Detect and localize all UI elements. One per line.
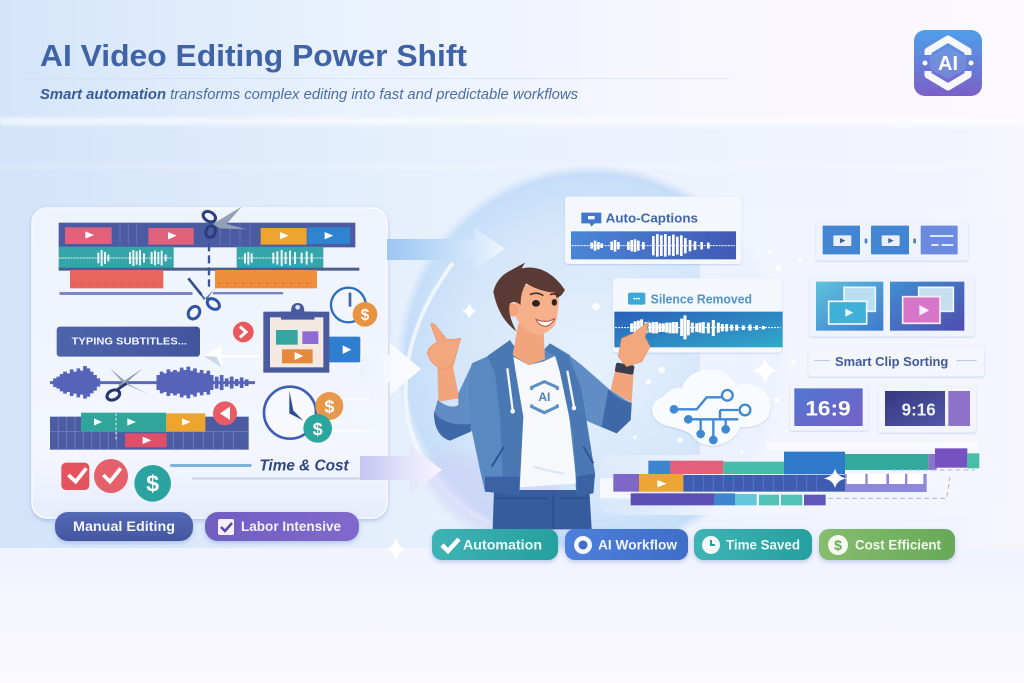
pill: cost efficient (819, 529, 955, 560)
icon: top scissors (201, 207, 247, 239)
shirt AI logo (532, 382, 557, 413)
sparkle dots (592, 249, 802, 454)
pill: cost efficient: $ (834, 537, 842, 553)
timeline: cut video track (59, 223, 359, 295)
character: presenter (427, 263, 650, 529)
icon: clipboard (263, 303, 329, 373)
panel: AI results (565, 197, 995, 515)
icon: clock with coin top (331, 288, 377, 327)
ratio tile: 9:16 (878, 387, 976, 433)
central glow behind character (396, 164, 788, 556)
card: auto-captions (565, 197, 742, 264)
hoodie hood and trim (485, 340, 595, 495)
pill: AI workflow (565, 529, 688, 560)
sparkle (462, 303, 477, 319)
card: silence removed (613, 278, 783, 353)
icon: lower scissors (186, 278, 221, 321)
arrow: middle (360, 343, 421, 395)
pill: labor intensive: Labor Intensive (241, 518, 341, 534)
arrow: clipboard to subtitles (203, 345, 260, 367)
icon: AI cloud (652, 369, 771, 446)
pill: time saved: Time Saved (726, 536, 800, 552)
ratio tile: 16:9 (790, 384, 868, 431)
icon: bottom sparkle (386, 538, 406, 560)
timeline: AI assembled (600, 442, 979, 505)
subtitle: Smart automation transforms complex editing into fast and predictable workflows (40, 86, 578, 103)
shirt AI logo: AI (538, 390, 550, 404)
icon: clock with coins: $ (313, 419, 323, 439)
icon: blue clip (328, 337, 360, 362)
arrow: lower (360, 445, 442, 495)
shirt (513, 356, 577, 487)
icon: clock with coin top: $ (361, 307, 370, 324)
label: smart clip sorting: Smart Clip Sorting (835, 355, 948, 369)
timeline: lower track (50, 413, 249, 450)
pill: cost efficient: Cost Efficient (855, 536, 941, 552)
typing subtitles box: TYPING SUBTITLES... (72, 337, 187, 348)
icon: dollar coin (134, 465, 171, 502)
typing subtitles box (57, 327, 200, 357)
pill: AI workflow: AI Workflow (598, 536, 677, 552)
hoodie (468, 340, 595, 495)
row: clip sequence (816, 221, 968, 261)
pill: automation (432, 529, 558, 560)
arrow: top (387, 228, 505, 270)
pill: automation: Automation (463, 536, 542, 552)
card: silence removed: Silence Removed (651, 292, 752, 306)
card: auto-captions: Auto-Captions (606, 211, 698, 225)
icon: red checkmarks (61, 459, 128, 493)
icon: clock with coins: $ (324, 397, 334, 417)
panel: manual editing (32, 207, 387, 518)
icon: AI logo: AI (938, 53, 958, 75)
neck (513, 323, 545, 365)
ratio tile: 16:9: 16:9 (805, 396, 851, 420)
hair (493, 263, 565, 332)
left arm and hand (427, 324, 497, 441)
icon: clock with coins (264, 387, 373, 443)
pill: time saved (694, 529, 812, 560)
icon: dollar coin: $ (146, 471, 159, 497)
pill: manual editing (55, 512, 193, 541)
pill: labor intensive (205, 512, 359, 541)
pill: manual editing: Manual Editing (73, 518, 175, 534)
face (530, 293, 559, 326)
jeans (493, 490, 592, 529)
icon: red next button (233, 322, 254, 342)
row: video thumbnails (809, 275, 974, 337)
card: silence removed: ••• (633, 296, 641, 303)
waveform with scissors (50, 366, 255, 402)
icon: sparkle (753, 358, 777, 383)
icon: AI logo (914, 30, 982, 96)
head (513, 285, 559, 335)
ratio tile: 9:16: 9:16 (902, 400, 936, 420)
right arm and hand (570, 322, 650, 433)
label: smart clip sorting (808, 346, 984, 377)
title: AI Video Editing Power Shift (40, 38, 467, 73)
icon: red back button (213, 401, 237, 425)
time and cost label: Time & Cost (259, 458, 349, 475)
